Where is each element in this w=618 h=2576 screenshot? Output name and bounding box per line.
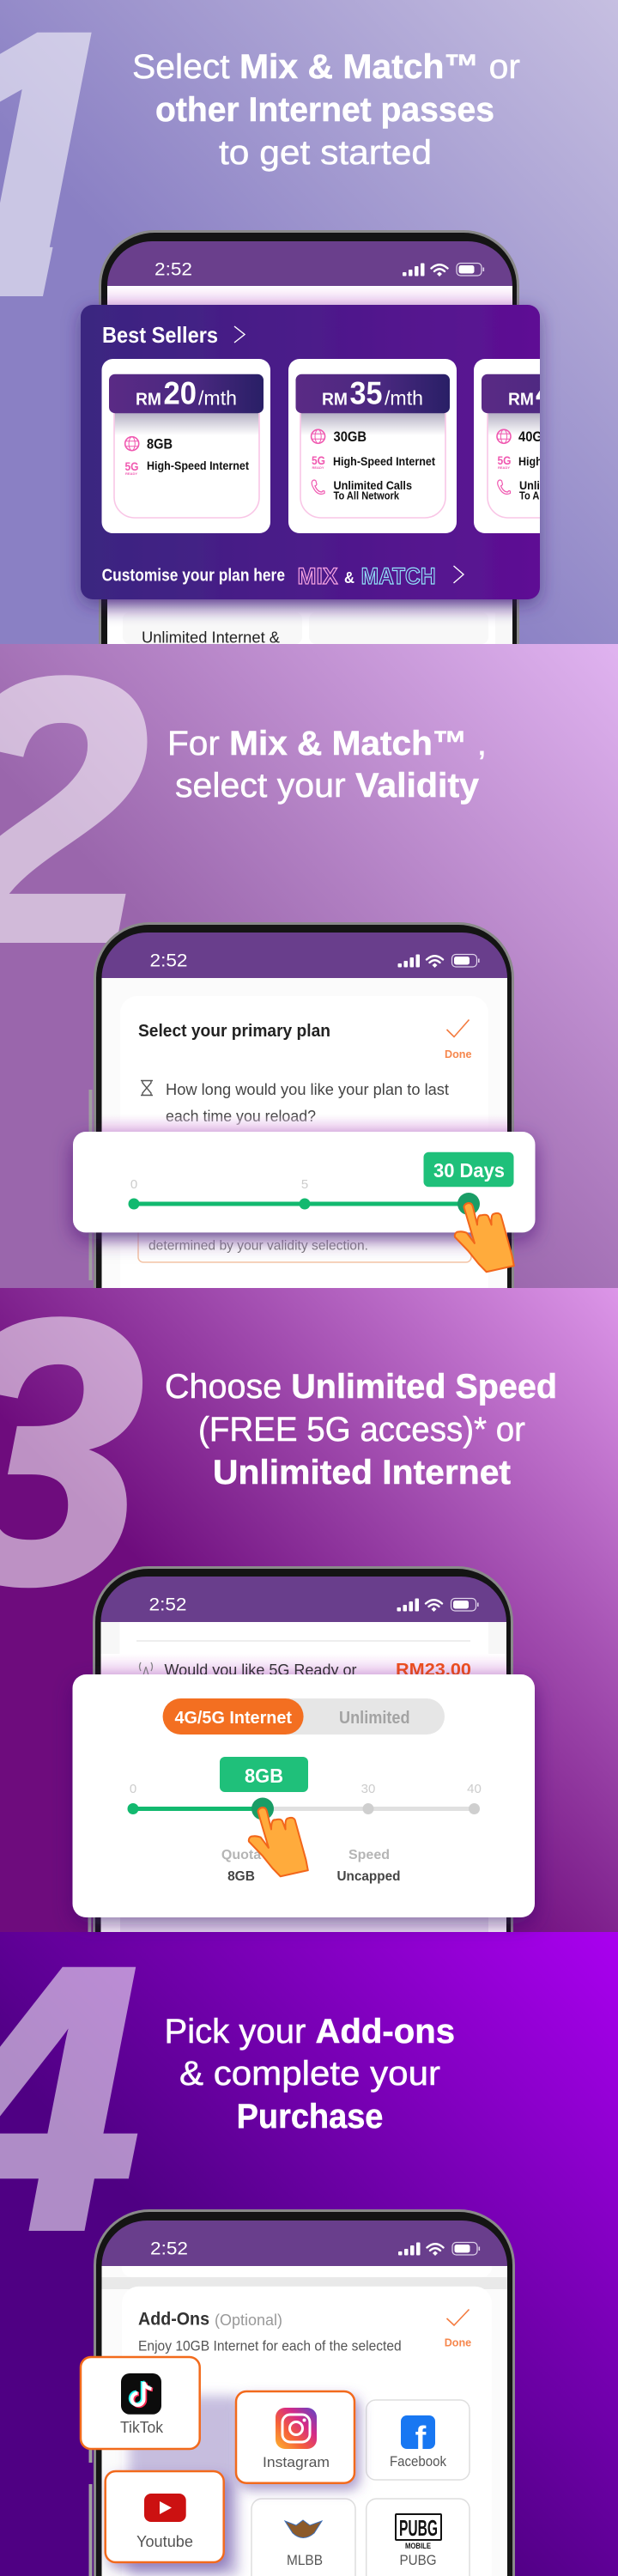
validity slider card (73, 1132, 536, 1232)
plan card RM20: 8GB (147, 436, 173, 453)
icon: done check (446, 2310, 469, 2325)
content cards below banner (107, 599, 512, 646)
quota slider (127, 1782, 482, 1820)
step 3 heading: Unlimited Internet (213, 1454, 511, 1492)
icon: youtube (144, 2494, 186, 2522)
plan card RM35: To All Network (333, 489, 400, 501)
mix and match neon logo (297, 563, 436, 589)
status bar: 2:52 (149, 951, 187, 970)
customise text: Customise your plan here (102, 566, 285, 586)
icon: pointing hand (249, 1807, 308, 1876)
tiktok tile: TikTok (120, 2419, 164, 2436)
icon: pointing hand (455, 1203, 514, 1272)
icon: instagram (276, 2408, 317, 2449)
plan card RM20: READY (125, 471, 137, 476)
quota slider: 40 (467, 1782, 482, 1796)
status bar: 2:52 (154, 259, 192, 280)
mlbb tile (251, 2499, 355, 2576)
step 3 heading: (FREE 5G access)* or (198, 1411, 525, 1449)
lower screen card (120, 1917, 488, 1932)
8GB pill (220, 1757, 308, 1792)
plan card RM35: RM (322, 391, 348, 410)
step 2 heading: For Mix & Match™ , (167, 725, 487, 762)
5G question row: RM23.00 (396, 1661, 471, 1680)
primary plan card: Select your primary plan (138, 1022, 330, 1041)
8GB pill: 8GB (245, 1765, 283, 1787)
content cards below banner: Unlimited Internet & (142, 629, 280, 646)
plan card RM20: 20 (163, 376, 197, 411)
quota slider: 0 (130, 1782, 136, 1796)
mix and match neon logo: MATCH (361, 563, 436, 589)
status bar (149, 951, 480, 970)
step 1 heading (132, 48, 520, 172)
5G question row (101, 1622, 506, 1680)
step 4 heading: & complete your (179, 2055, 440, 2093)
plan card partial RM4x (474, 359, 540, 533)
icon: tiktok (121, 2373, 161, 2415)
plan card partial RM4x: 40GB (518, 428, 551, 445)
primary plan card: Done (445, 1048, 472, 1060)
slider track: 0 (130, 1177, 137, 1192)
quota slider: 30 (361, 1782, 375, 1796)
instagram tile (236, 2391, 354, 2483)
quota and speed labels: Uncapped (336, 1869, 400, 1884)
phone 1 (99, 230, 519, 646)
step 4 heading: Pick your Add-ons (165, 2013, 455, 2050)
plan card RM20: /mth (198, 387, 237, 410)
youtube tile: Youtube (136, 2533, 193, 2550)
plan card partial RM4x: 45 (536, 376, 571, 411)
primary plan card: each time you reload? (166, 1108, 316, 1125)
icon: hourglass (141, 1080, 153, 1096)
plan card RM20 (101, 359, 270, 533)
icon: done check (446, 1020, 469, 1037)
mlbb tile: MLBB (287, 2552, 323, 2568)
step 1 heading: other Internet passes (155, 91, 494, 129)
30 days pill (424, 1152, 513, 1187)
step 2 heading: select your Validity (175, 767, 480, 805)
plan card partial RM4x: 5G (498, 453, 512, 467)
toggle: 4G/5G Internet (175, 1709, 292, 1728)
best sellers heading: Best Sellers (102, 322, 218, 348)
panel: step 1 background (0, 0, 618, 644)
tiktok tile (81, 2357, 200, 2449)
primary plan card (101, 996, 507, 1288)
lilac shadow behind tiles (129, 2396, 239, 2576)
primary plan card: How long would you like your plan to last (166, 1081, 449, 1098)
plan card RM35: /mth (385, 387, 423, 410)
step 4 heading (165, 2013, 455, 2136)
quota and speed labels: Quota (221, 1848, 261, 1862)
quota and speed labels: 8GB (227, 1869, 255, 1884)
30 days pill: 30 Days (433, 1159, 505, 1182)
add-ons card: (Optional) (215, 2312, 282, 2329)
icon: chevron (234, 326, 245, 343)
plan card RM20: RM (136, 391, 161, 410)
quota and speed labels (221, 1848, 400, 1884)
toggle (163, 1698, 445, 1735)
plan card RM35: READY (312, 465, 324, 470)
primary plan card: determined by your validity selection. (148, 1238, 368, 1254)
youtube tile (106, 2471, 224, 2562)
step 1 heading: to get started (219, 134, 432, 172)
plan card RM20: 5G (125, 459, 139, 473)
step 3 heading: Choose Unlimited Speed (165, 1368, 557, 1406)
plan card partial RM4x: To All Network (519, 489, 585, 501)
status bar: 2:52 (150, 2239, 188, 2258)
step 2 heading (167, 725, 487, 805)
pubg tile: MOBILE (405, 2542, 431, 2550)
pubg tile: PUBG (400, 2552, 436, 2568)
status bar (150, 2239, 480, 2258)
add-ons card: Enjoy 10GB Internet for each of the selected (138, 2339, 402, 2354)
status bar (149, 1595, 479, 1614)
plan card RM35 (288, 359, 457, 533)
facebook tile: Facebook (390, 2454, 447, 2470)
plan cards (101, 359, 540, 533)
slider track (129, 1177, 480, 1215)
status bar (154, 259, 484, 280)
phone 3 (88, 1566, 513, 1932)
facebook tile: f (415, 2421, 427, 2457)
slider track: 5 (301, 1177, 308, 1192)
add-ons card (101, 2266, 507, 2576)
plan card RM35: Unlimited Calls (333, 478, 412, 492)
status bar: 2:52 (149, 1595, 187, 1614)
step 1 heading: Select Mix & Match™ or (132, 48, 520, 86)
panel: step 4 background (0, 1932, 618, 2576)
pubg tile: PUBG (399, 2515, 438, 2541)
instagram tile: Instagram (263, 2454, 330, 2470)
plan card partial RM4x: RM (508, 391, 534, 410)
add-ons card: Done (445, 2336, 471, 2349)
mix and match neon logo: MIX (297, 563, 338, 589)
plan card RM35: High-Speed Internet (333, 454, 435, 468)
panel: step 3 background (0, 1288, 618, 1932)
quota and speed labels: Speed (348, 1848, 390, 1862)
plan card RM35: 35 (350, 376, 383, 411)
step 4 heading: Purchase (237, 2098, 383, 2136)
phone 2 (89, 922, 514, 1288)
phone 4 (89, 2209, 515, 2576)
panel: best sellers card (81, 305, 618, 599)
icon: chevron (453, 566, 464, 583)
add-ons card: Add-Ons (138, 2310, 209, 2330)
pubg tile (367, 2499, 470, 2576)
panel: step 2 background (0, 644, 618, 1288)
internet quota card (72, 1674, 535, 1917)
plan card partial RM4x: Unlimited Calls (519, 478, 598, 492)
plan card partial RM4x: READY (498, 465, 510, 470)
step 3 heading (165, 1368, 557, 1492)
plan card RM35: 5G (312, 453, 325, 467)
plan card RM20: High-Speed Internet (147, 459, 249, 472)
5G question row: Would you like 5G Ready or (165, 1662, 357, 1679)
facebook tile (367, 2400, 470, 2480)
plan card RM35: 30GB (333, 428, 367, 445)
mix and match neon logo: & (344, 569, 354, 586)
toggle: Unlimited (339, 1709, 410, 1728)
